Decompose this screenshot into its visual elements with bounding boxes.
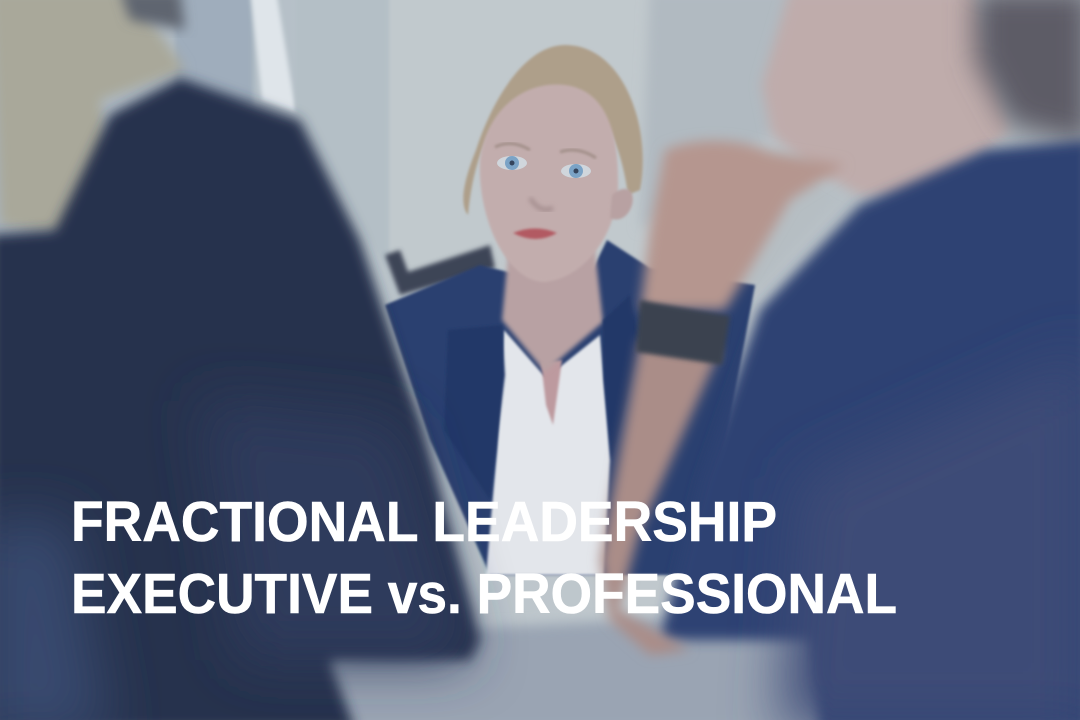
left figure: blonde hair [0,0,185,235]
left figure: dark jacket [0,78,480,720]
table [330,610,900,720]
mouth [513,228,557,239]
title line 2: EXECUTIVE vs. PROFESSIONAL [71,562,897,626]
nose [530,198,553,210]
candidate: face [480,85,633,282]
smartwatch [636,300,730,365]
candidate: jacket [385,240,755,575]
right figure: face and neck [762,0,1010,200]
title line 1: FRACTIONAL LEADERSHIP [71,490,777,554]
chair back [385,245,495,295]
title [71,490,897,626]
right figure: navy top [660,140,1080,720]
eyes [497,156,527,170]
neck [502,250,603,372]
lapels [444,325,505,500]
candidate: hair [463,45,643,215]
brows [495,144,530,150]
right figure: hair [975,0,1080,145]
white blouse [486,330,610,575]
right figure: hand and arm [600,141,845,655]
